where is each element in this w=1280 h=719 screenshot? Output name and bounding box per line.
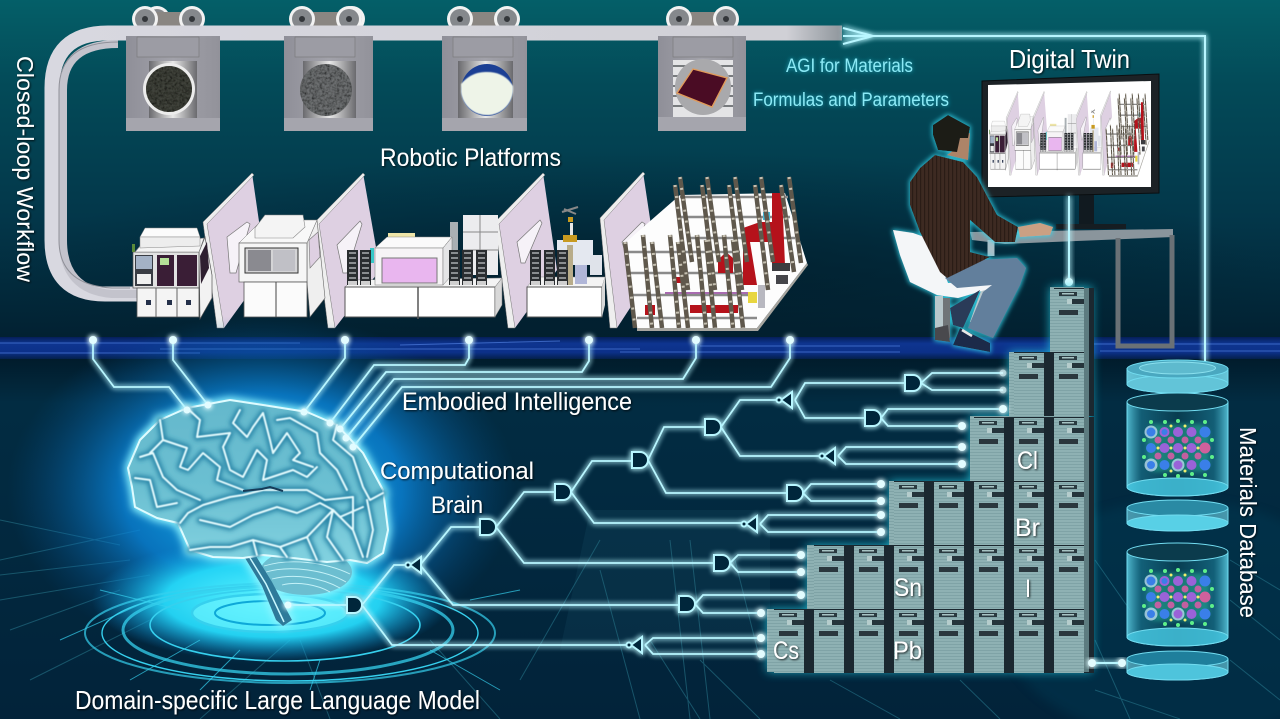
monitor mini view (989, 91, 1149, 177)
brain stem (245, 556, 292, 626)
terminals (284, 370, 1007, 658)
row 2 (807, 545, 1094, 609)
top disc (1127, 360, 1228, 393)
row 4 (970, 416, 1094, 481)
label: closed-loop workflow: Closed-loop Workflow (12, 56, 38, 282)
materials database cylinders (1127, 360, 1228, 680)
far leg (950, 290, 980, 328)
element labels: Pb (893, 637, 922, 665)
label: Embodied Intelligence: Embodied Intelligence (402, 388, 632, 416)
holographic ring platform (60, 583, 520, 690)
label: AGI for Materials: AGI for Materials (786, 56, 913, 77)
chair (893, 230, 992, 338)
cart 4: film sample (658, 36, 746, 131)
cerebrum silhouette (128, 400, 388, 563)
row 1 (767, 609, 1094, 673)
hand (1018, 223, 1053, 237)
link from stack to database (1088, 659, 1126, 667)
cylinder one (1127, 393, 1228, 496)
gyri highlights (135, 408, 383, 560)
element labels: Br (1015, 514, 1040, 542)
brain glow (7, 315, 517, 665)
crystal structure two (1142, 568, 1214, 627)
server stack periodic table (767, 287, 1094, 673)
element labels: I (1025, 575, 1031, 603)
robotic platforms line (132, 172, 808, 331)
closed-loop rail (52, 33, 842, 294)
hair (933, 115, 970, 152)
desk (970, 229, 1173, 346)
label: Robotic Platforms: Robotic Platforms (380, 144, 561, 172)
shoes (935, 325, 990, 352)
person at workstation (893, 115, 1053, 352)
label: Formulas and Parameters: Formulas and Parameters (753, 90, 949, 111)
row 3 (889, 481, 1094, 545)
label: Digital Twin: Digital Twin (1009, 44, 1130, 74)
label: Materials Database: Materials Database (1235, 427, 1261, 618)
cart 1: powder (126, 36, 220, 131)
logic gate tree to element servers (284, 370, 1007, 658)
crystal structure one (1142, 419, 1214, 478)
central crack (243, 487, 283, 491)
computational brain (128, 400, 388, 626)
gates (347, 375, 921, 653)
row 5 (1009, 352, 1094, 416)
digital twin monitor (982, 74, 1159, 229)
row 6 (1050, 287, 1094, 352)
link from monitor to server stack (1065, 196, 1073, 286)
horizontal light band (0, 337, 1280, 359)
neck and face (947, 133, 970, 160)
cart wheels and carriages (132, 6, 739, 32)
output arrow and link to database (843, 28, 1205, 362)
brain label: Brain: Brain (431, 492, 483, 519)
element labels: Sn (894, 574, 922, 602)
label: Domain-specific Large Language Model: Domain-specific Large Language Model (75, 685, 480, 715)
brain label: Computational: Computational (380, 458, 534, 485)
middle disc (1127, 500, 1228, 531)
cart 2: particles (284, 36, 373, 131)
element labels (773, 447, 1040, 665)
element labels: Cl (1017, 447, 1038, 475)
cart 3: white crystal (442, 36, 527, 131)
gyri shading (135, 408, 383, 560)
shirt (910, 155, 1018, 278)
cylinder two (1127, 543, 1228, 646)
jeans (945, 258, 1026, 338)
embodied intelligence circuit links (89, 336, 794, 450)
bottom disc (1127, 651, 1228, 680)
element labels: Cs (773, 637, 799, 665)
cerebellum (260, 549, 352, 595)
